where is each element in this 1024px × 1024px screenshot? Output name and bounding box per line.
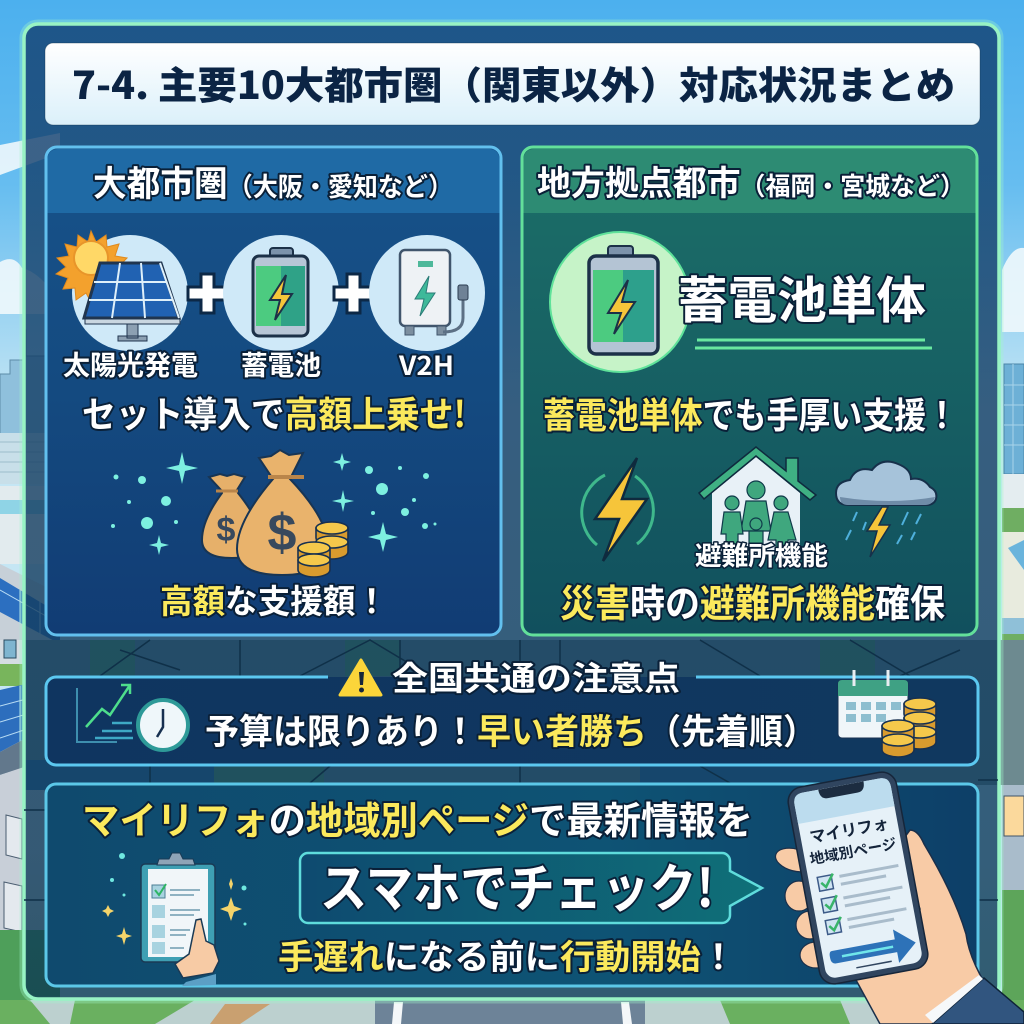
icon labels bbox=[63, 344, 454, 383]
icon: battery bbox=[223, 235, 339, 351]
icon: money bags and sparkles: $ bbox=[217, 511, 236, 549]
checklist bbox=[817, 861, 908, 934]
callout: battery-only support: 蓄電池単体でも手厚い支援！ bbox=[543, 387, 958, 439]
icon: plus bbox=[334, 274, 373, 313]
panel border with gap for heading bbox=[46, 677, 978, 765]
panel: nationwide caution bbox=[46, 652, 978, 765]
icon labels: 太陽光発電 bbox=[63, 344, 198, 383]
callout: high support amount: 高額な支援額！ bbox=[160, 575, 388, 623]
icon: solar panel with sun bbox=[56, 231, 188, 351]
panel: check on smartphone call to action bbox=[46, 784, 978, 986]
callout: shelter function in disasters: 災害時の避難所機能確保 bbox=[560, 573, 945, 628]
large bag bbox=[237, 450, 328, 575]
road and ground bbox=[0, 1000, 1024, 1024]
icon: storm cloud bbox=[836, 462, 936, 557]
suit sleeve bbox=[932, 978, 1024, 1024]
right side buildings bbox=[1004, 364, 1024, 474]
underline decoration bbox=[695, 340, 932, 348]
icon: money bags and sparkles: $ bbox=[268, 504, 297, 562]
arm and palm bbox=[850, 830, 996, 1024]
icon: chart and clock bbox=[77, 685, 188, 750]
panel heading: 大都市圏（大阪・愛知など） bbox=[93, 156, 453, 207]
icon: warning triangle bbox=[340, 660, 381, 695]
callout: act before too late: 手遅れになる前に行動開始！ bbox=[278, 930, 736, 979]
small bag bbox=[202, 474, 260, 558]
shelter label: 避難所機能 bbox=[695, 536, 828, 573]
smartphone bbox=[786, 770, 930, 986]
callout: set introduction: セット導入で高額上乗せ! bbox=[82, 386, 466, 438]
arrow bbox=[827, 926, 919, 975]
title text: 7-4. 主要10大都市圏（関東以外）対応状況まとめ bbox=[72, 55, 955, 110]
icon: clipboard with pointing hand bbox=[102, 853, 246, 986]
text: budget limited, first come first served: 予算は限りあり！早い者勝ち（先着順） bbox=[205, 704, 817, 755]
icon: shelter house with family bbox=[699, 447, 816, 555]
icon: V2H charger bbox=[369, 235, 485, 351]
icon labels: V2H bbox=[398, 346, 454, 383]
fingers bbox=[773, 844, 832, 968]
icon: power bolt bbox=[582, 458, 653, 561]
panel header band bbox=[524, 149, 976, 213]
central houses seen through the frame bbox=[24, 640, 1024, 785]
clouds bbox=[0, 133, 1024, 332]
icon labels: 蓄電池 bbox=[241, 344, 321, 383]
heading: battery only: 蓄電池単体 bbox=[678, 261, 926, 333]
icon: battery in circle bbox=[550, 232, 690, 372]
left side buildings bbox=[0, 330, 46, 434]
panel: regional core cities bbox=[522, 147, 977, 635]
icon: calendar and coins bbox=[838, 670, 936, 757]
panel: major metropolitan areas bbox=[46, 147, 501, 635]
speech bubble: check on smartphone: スマホでチェック! bbox=[320, 847, 714, 922]
smartphone: 地域別ページ bbox=[808, 833, 898, 869]
headline: latest info on regional page: マイリフォの地域別ページで最新情報を bbox=[82, 790, 753, 845]
phone text: マイリフォ bbox=[807, 810, 890, 848]
panel heading: 地方拠点都市（福岡・宮城など） bbox=[537, 156, 965, 205]
icon: plus bbox=[188, 274, 227, 313]
title bar bbox=[45, 43, 980, 125]
icon: money bags and sparkles bbox=[111, 450, 436, 577]
panel header band bbox=[48, 149, 500, 213]
icon: hand holding smartphone bbox=[773, 770, 1024, 1024]
heading: nationwide caution: 全国共通の注意点 bbox=[392, 652, 680, 700]
